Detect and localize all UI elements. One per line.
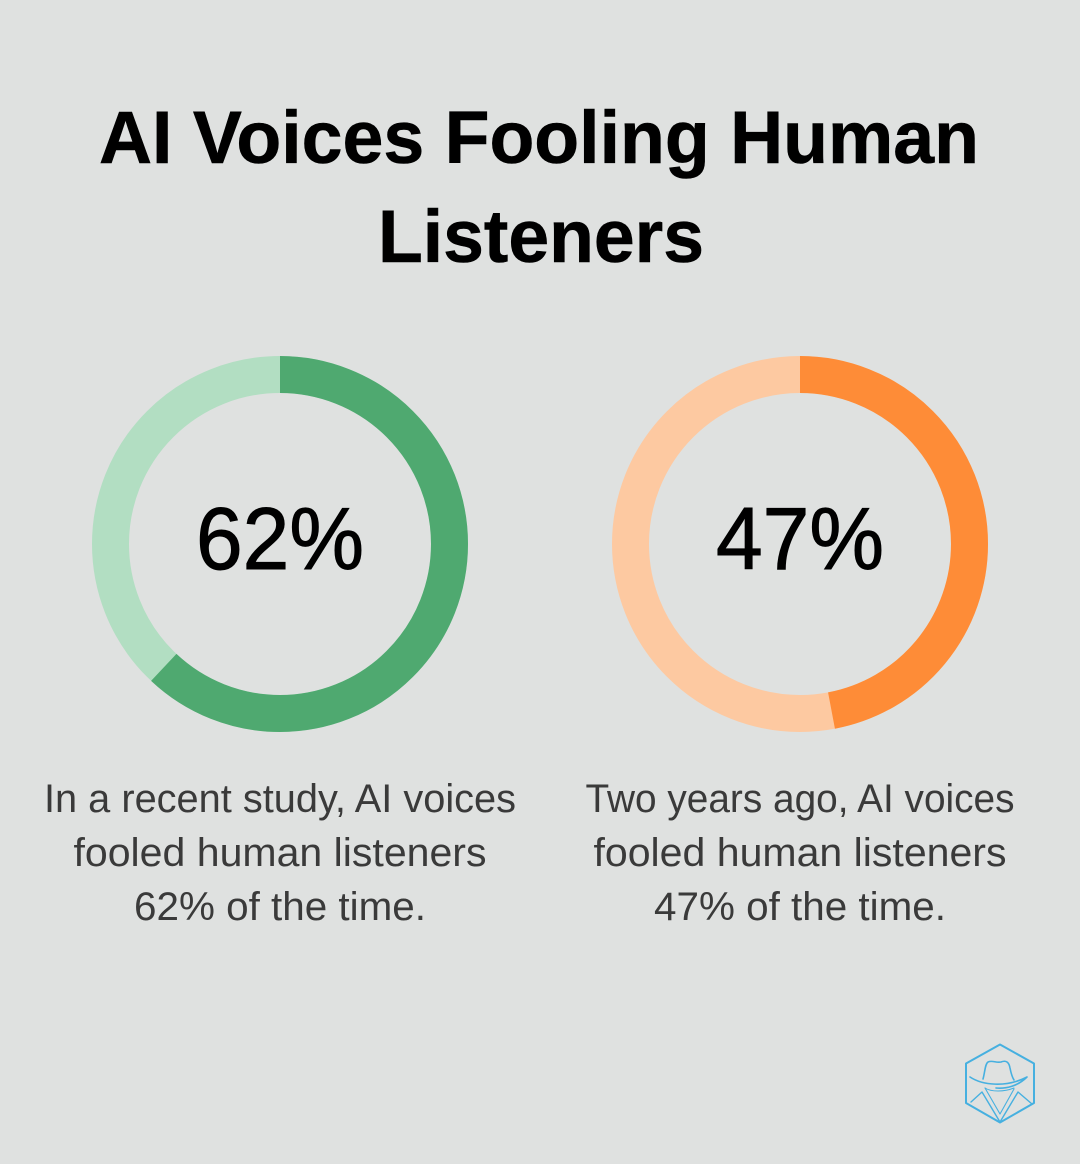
panel: 47% study	[586, 374, 1014, 929]
description: 62%: fooled human listeners	[74, 831, 487, 875]
title: Listeners	[378, 195, 704, 278]
description: 62%: In a recent study, AI voices	[44, 777, 516, 821]
icon: hexagon logo with hat	[966, 1044, 1034, 1122]
description: 47%: 47% of the time.	[654, 885, 946, 929]
donut chart: 62%	[110, 374, 450, 714]
panel: 62% study	[44, 374, 516, 929]
description: 62%: 62% of the time.	[134, 885, 426, 929]
title: AI Voices Fooling Human	[99, 96, 979, 179]
description: 47%: Two years ago, AI voices	[586, 777, 1014, 821]
donut chart: 47%	[630, 374, 970, 714]
title	[99, 96, 979, 278]
stat: 62%: 62%	[196, 489, 364, 588]
description: 62%	[44, 777, 516, 929]
description: 47%	[586, 777, 1014, 929]
description: 47%: fooled human listeners	[594, 831, 1006, 875]
stat: 47%: 47%	[716, 489, 884, 588]
